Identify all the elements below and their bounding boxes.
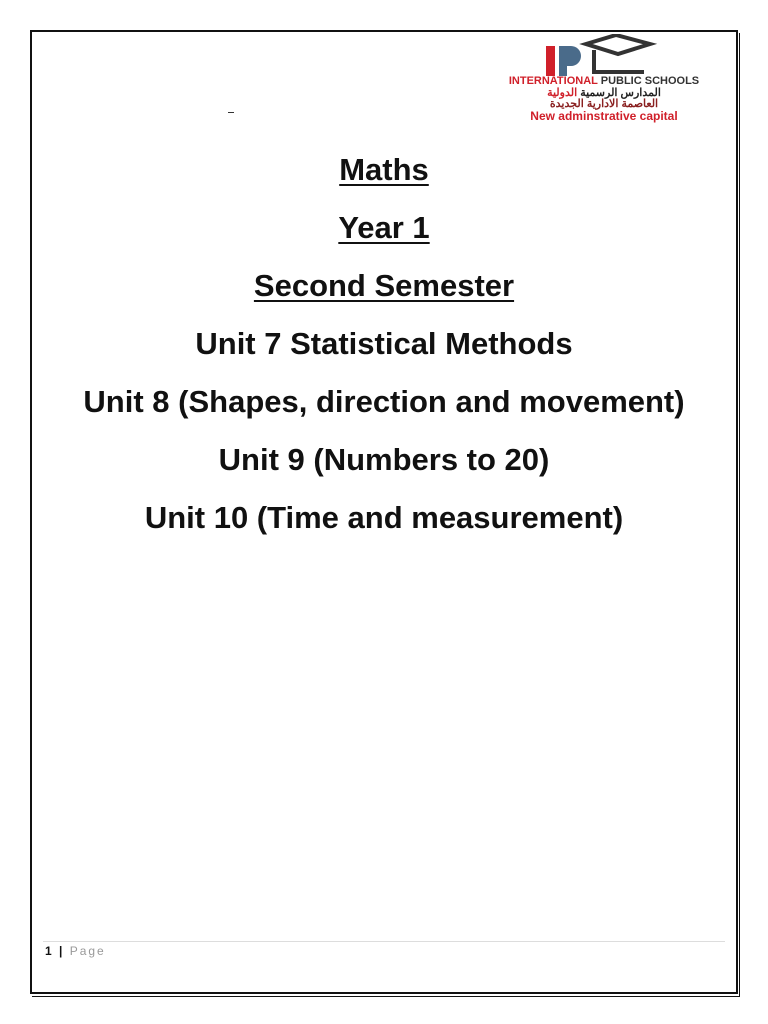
heading: Year 1: Year 1	[338, 210, 430, 245]
logo mark	[546, 34, 657, 76]
logo	[509, 34, 699, 122]
heading: Second Semester: Second Semester	[254, 268, 514, 303]
logo text	[509, 75, 699, 122]
unit 8: Unit 8 (Shapes, direction and movement)	[83, 384, 685, 419]
logo text: المدارس الرسمية الدولية	[547, 86, 661, 98]
footer: page number: 1 | Page	[45, 944, 106, 958]
logo text: New adminstrative capital	[530, 108, 678, 122]
unit 7: Unit 7 Statistical Methods	[195, 326, 573, 361]
footer rule	[43, 941, 725, 942]
small dash	[228, 112, 234, 113]
logo text: العاصمة الادارية الجديدة	[550, 98, 658, 110]
unit 10: Unit 10 (Time and measurement)	[145, 500, 623, 535]
unit 9: Unit 9 (Numbers to 20)	[219, 442, 549, 477]
logo text: INTERNATIONAL PUBLIC SCHOOLS	[509, 75, 699, 87]
title: Maths: Maths	[339, 152, 429, 187]
